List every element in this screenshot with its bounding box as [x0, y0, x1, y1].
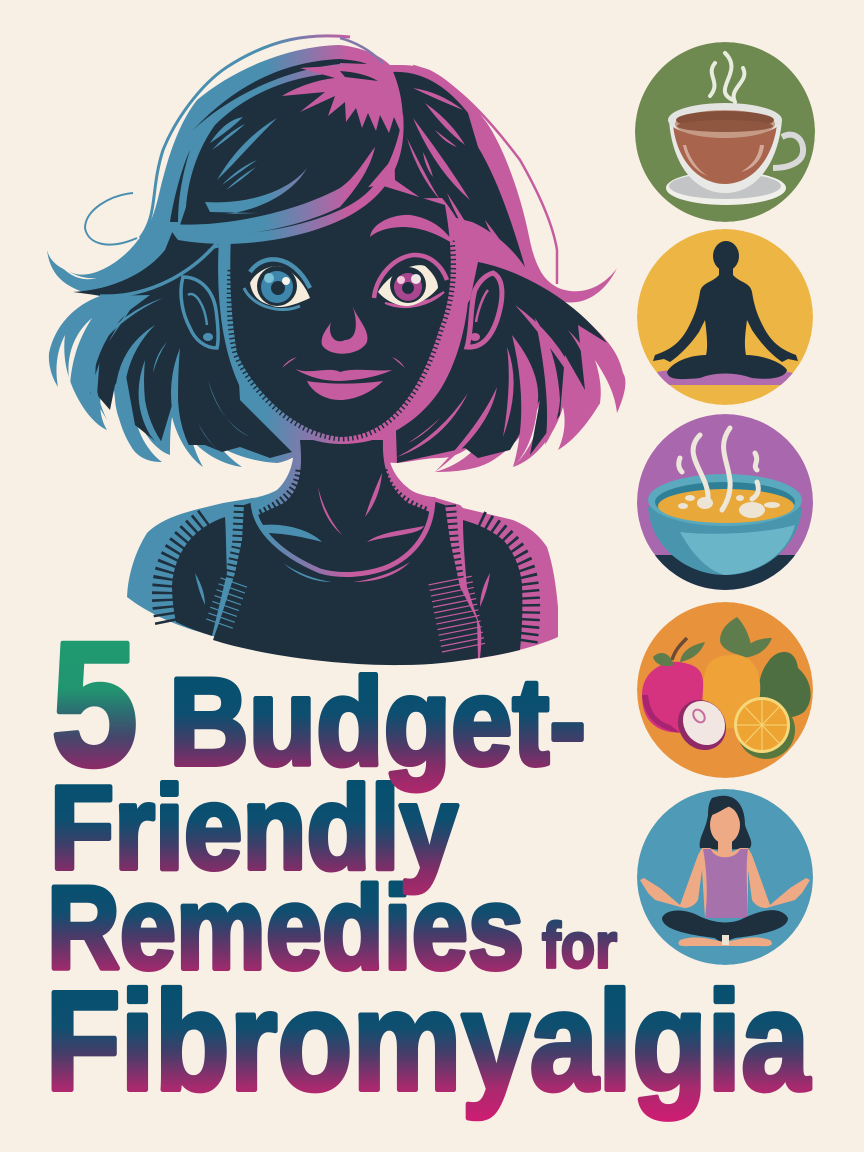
hair strands left — [80, 117, 277, 467]
right ear — [467, 273, 502, 347]
mouth — [282, 357, 405, 400]
title line: Remedies: Remedies — [47, 862, 524, 994]
icon: fruits and vegetables — [637, 602, 813, 778]
left ear — [181, 277, 218, 348]
title line: Budget-: Budget- — [169, 654, 586, 792]
hair dark areas — [73, 59, 607, 463]
thin hair outlines and curl — [85, 36, 557, 284]
title word: for: for — [542, 910, 617, 982]
title line: Friendly: Friendly — [50, 762, 458, 894]
nose — [322, 305, 367, 354]
right brow — [370, 215, 455, 245]
title — [46, 605, 811, 1120]
face — [181, 185, 502, 444]
icon: woman meditating — [637, 789, 813, 965]
icon: tea cup — [635, 42, 815, 222]
hair strands right — [397, 88, 600, 472]
hair — [47, 36, 625, 472]
left eye — [244, 259, 310, 310]
shoulders and tank top — [127, 490, 558, 665]
fringe — [172, 59, 404, 244]
right eye — [374, 255, 447, 307]
hair silhouette — [47, 45, 625, 472]
face edge band — [218, 198, 470, 444]
icon: meditation silhouette — [637, 229, 813, 405]
left brow — [207, 240, 240, 250]
icon: soup bowl — [630, 414, 820, 595]
neck — [253, 436, 433, 575]
title digit: 5: 5 — [51, 605, 138, 803]
illustration: girl portrait — [47, 36, 625, 665]
